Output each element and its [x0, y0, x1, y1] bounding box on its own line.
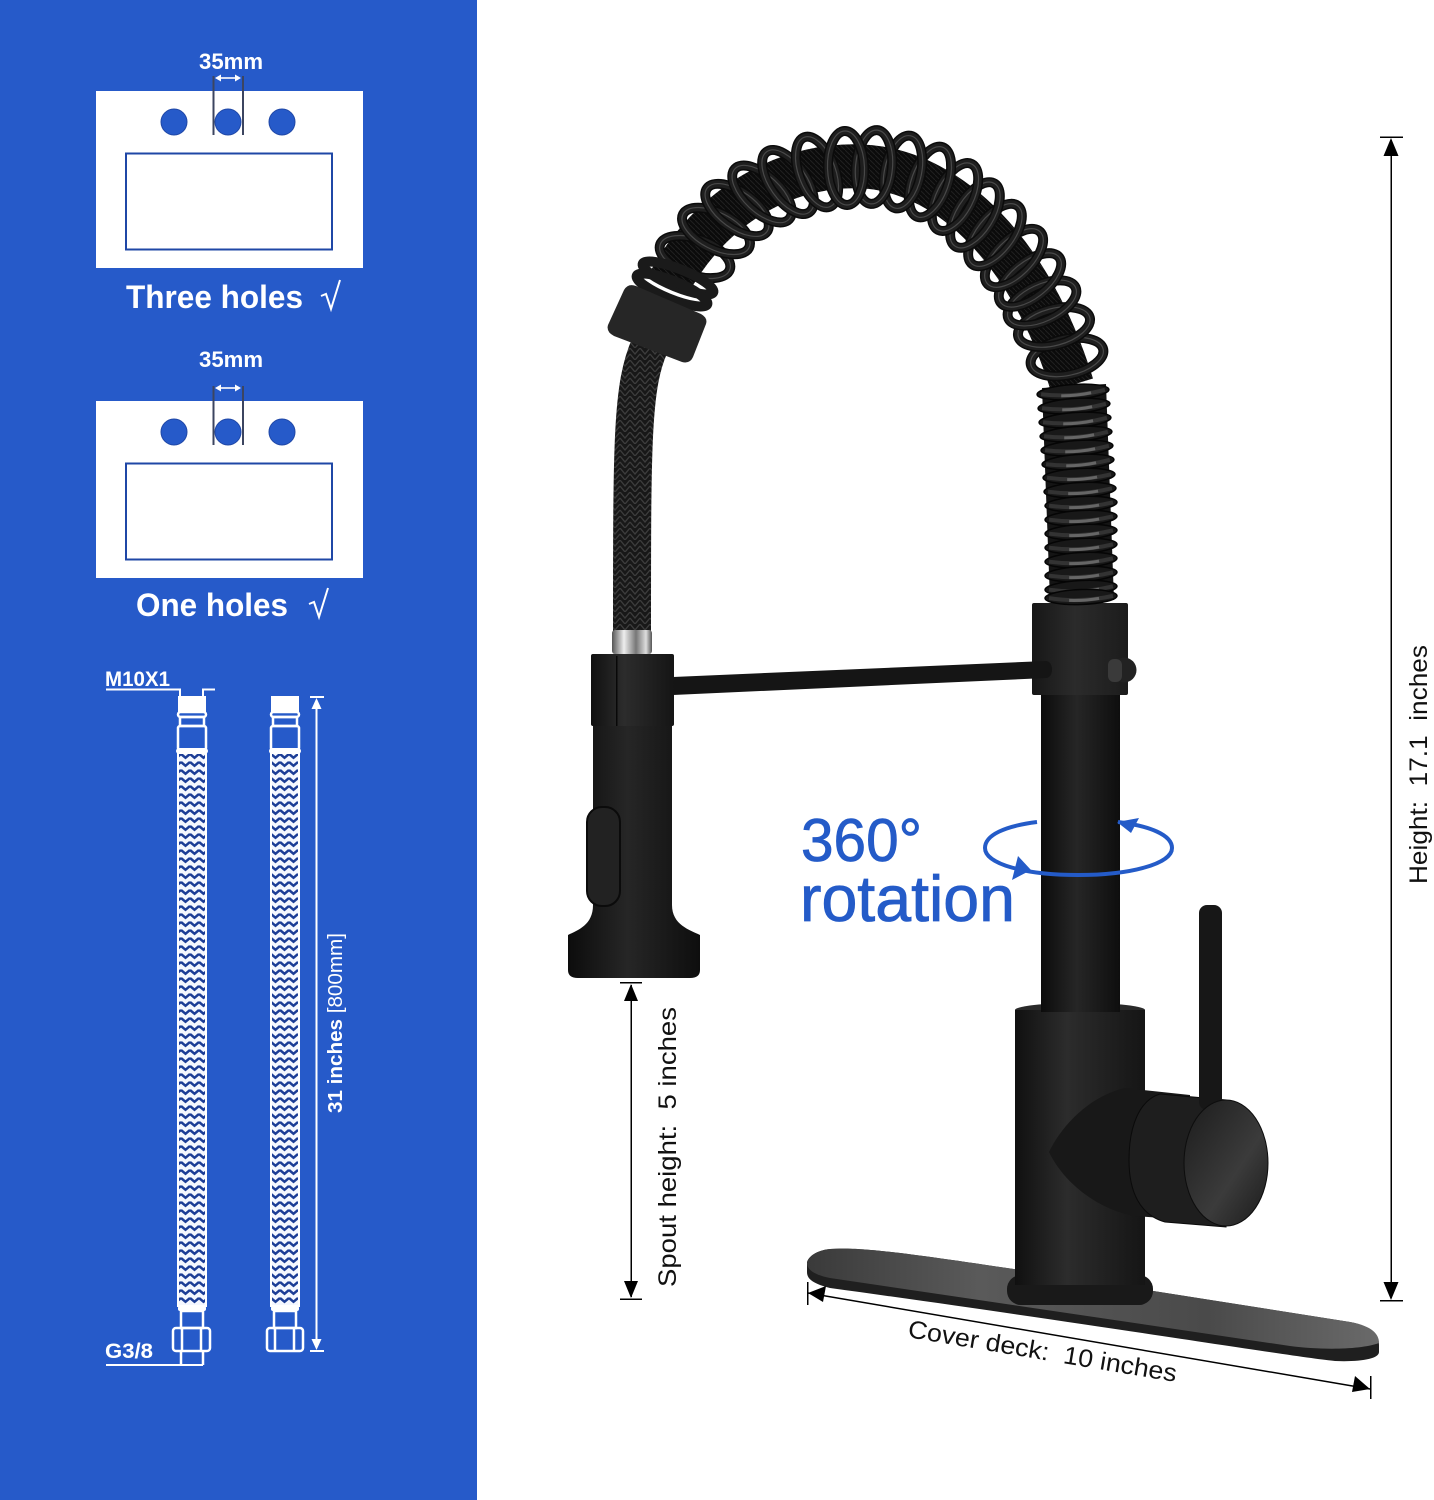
pull-down sprayer head: [568, 654, 700, 978]
faucet holes: [161, 109, 295, 135]
label: G3/8: [105, 1340, 203, 1365]
sink basin: [126, 464, 332, 560]
label: 360 rotation: 360°: [801, 807, 922, 874]
35mm double arrow: [215, 384, 241, 392]
35mm dimension lines: [214, 76, 243, 135]
faucet illustration: [568, 129, 1379, 1361]
set screw knob: [1108, 658, 1136, 682]
spray button: [587, 807, 620, 906]
caption: one holes: One holes: [136, 587, 288, 623]
icon: check mark one holes: [309, 588, 328, 617]
support bar: [673, 661, 1052, 695]
cover deck plate: [807, 1249, 1379, 1361]
mixer cylinder: [1129, 1094, 1226, 1227]
caption: three holes: Three holes: [126, 279, 303, 315]
label: M10X1: [105, 668, 215, 696]
label: cover deck width: Cover deck: 10 inches: [906, 1315, 1179, 1388]
label: spout height: Spout height: 5 inches: [654, 1007, 682, 1287]
arrow: total height: [1380, 136, 1403, 1302]
column collar: [1032, 603, 1128, 695]
main column: [1041, 690, 1120, 1012]
tight coil spring: [1037, 382, 1117, 606]
column base ring: [1007, 1275, 1153, 1305]
35mm dimension lines: [214, 386, 243, 445]
handle end disc: [1184, 1100, 1268, 1226]
sink basin: [126, 154, 332, 250]
chrome collar: [612, 630, 652, 654]
35mm double arrow: [215, 74, 241, 82]
label: 360 rotation: [800, 807, 1015, 935]
arrow: cover deck width: [807, 1282, 1372, 1399]
diagram: three-hole sink: [96, 49, 363, 315]
panel: blue installation sidebar: [0, 0, 477, 1500]
label: G3/8: G3/8: [105, 1340, 153, 1363]
label: hose length: 31 inches [800mm]: [325, 933, 347, 1113]
arrow: spout height: [620, 982, 642, 1300]
label: M10X1: M10X1: [105, 668, 170, 691]
braided hose: [632, 345, 650, 632]
diagram: one-hole sink: [96, 347, 363, 623]
sink plate: [96, 91, 363, 268]
mixer cone: [1049, 1088, 1190, 1220]
arrow: hose length: [310, 696, 324, 1352]
rotation arrow back arc: [985, 822, 1172, 875]
nozzle cap: [608, 285, 706, 362]
sink plate: [96, 401, 363, 578]
label: 35mm lower: 35mm: [199, 347, 263, 372]
hub body: [1015, 1003, 1145, 1285]
faucet holes: [161, 419, 295, 445]
label: total height: Height: 17.1 inches: [1405, 645, 1433, 884]
rotation arrowheads: [1012, 818, 1139, 880]
coil hose core: [668, 166, 1072, 385]
open coil spring: [654, 129, 1107, 383]
label: 360 rotation: rotation: [800, 862, 1015, 935]
icon: check mark three holes: [321, 280, 340, 309]
label: 35mm top: 35mm: [199, 49, 263, 74]
hose right: [267, 696, 303, 1351]
hose left: [173, 696, 210, 1365]
lever handle: [1199, 905, 1222, 1110]
nozzle cap rings: [633, 255, 717, 313]
